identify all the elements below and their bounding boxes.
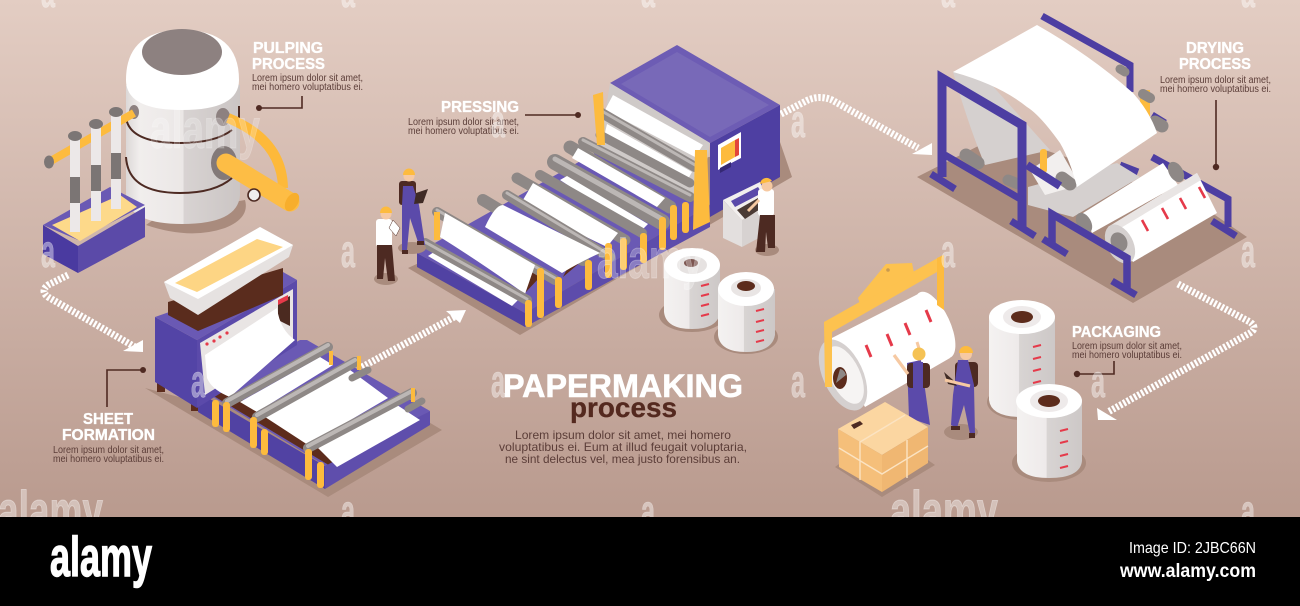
tank shadow (146, 200, 246, 233)
label: pulping process: PROCESS (252, 56, 325, 73)
label: drying process: PROCESS (1179, 56, 1251, 73)
stock watermarks: a (1091, 355, 1105, 407)
stock footer band: alamy (50, 525, 152, 588)
upper rollers and paper (583, 95, 703, 197)
label: sheet formation: Lorem ipsum dolor sit amet, (53, 445, 164, 456)
panel: sheet formation machine (145, 227, 442, 497)
stock watermarks: alamy (597, 227, 703, 290)
intro text: Lorem ipsum dolor sit amet, mei homero (515, 428, 731, 442)
yellow posts (212, 351, 415, 488)
label: sheet formation: SHEET (83, 411, 134, 428)
stock watermarks: a (791, 355, 805, 407)
label: drying process: mei homero voluptatibus ei. (1160, 84, 1271, 95)
rollers (227, 345, 422, 448)
yellow posts (434, 92, 710, 327)
machine body (155, 272, 297, 411)
title (503, 368, 743, 423)
stock watermarks: a (641, 485, 655, 537)
intro text: ne sint delectus vel, mea justo forensibus an. (505, 452, 740, 466)
stock watermarks: a (791, 95, 805, 147)
enclosure (600, 45, 780, 217)
label: packaging: mei homero voluptatibus ei. (1072, 350, 1182, 361)
machine shadow (145, 345, 442, 497)
stock watermarks: a (341, 485, 355, 537)
label: drying process: Lorem ipsum dolor sit amet, (1160, 75, 1271, 86)
stock watermarks: a (491, 355, 505, 407)
label: packaging: PACKAGING (1072, 324, 1161, 341)
worker at control desk (748, 178, 779, 256)
title: process (570, 392, 677, 423)
arrow: pulping to sheet formation (44, 275, 143, 352)
stock watermarks: a (491, 95, 505, 147)
finished rolls (1072, 159, 1217, 269)
lifted paper roll (809, 286, 964, 418)
label: sheet formation: mei homero voluptatibus ei. (53, 454, 164, 465)
arrow: sheet formation to pressing (362, 310, 466, 367)
stock footer band (0, 517, 1300, 606)
label: packaging: Lorem ipsum dolor sit amet, (1072, 341, 1182, 352)
intro text: voluptatibus ei. Eum at illud feugait voluptaria, (499, 440, 747, 454)
yellow lifter (824, 255, 944, 387)
rear frame (1042, 16, 1236, 236)
arrow: drying to packaging (1097, 284, 1254, 420)
drying sheet (953, 25, 1157, 187)
middle rollers and paper (507, 147, 670, 257)
label: pulping process: PULPING (253, 40, 323, 57)
bed (417, 150, 710, 327)
panel: packaging (809, 255, 1086, 497)
tall paper roll (987, 300, 1057, 420)
worker in white shirt near pressing (374, 207, 400, 285)
stock watermarks: a (1241, 225, 1255, 277)
front frame (931, 78, 1060, 236)
guide rollers (966, 69, 1162, 184)
stock watermarks: alamy (890, 479, 998, 542)
stirring rods (44, 107, 134, 232)
title: PAPERMAKING (503, 368, 743, 404)
panel: pressing machine (408, 45, 792, 335)
machine shadow (917, 135, 1247, 303)
stock watermarks: a (1241, 485, 1255, 537)
label: sheet formation: FORMATION (62, 427, 155, 444)
yellow pipes (226, 118, 302, 214)
worker reaching to roll (894, 342, 930, 425)
front lower frame (1043, 214, 1136, 295)
stock watermarks: alamy (0, 479, 103, 542)
label: sheet formation (53, 367, 164, 465)
label: pressing: Lorem ipsum dolor sit amet, (408, 117, 519, 128)
short paper roll (1012, 384, 1086, 482)
label: pulping process: mei homero voluptatibus ei. (252, 82, 363, 93)
stock footer band: Image ID: 2JBC66N (1129, 540, 1256, 557)
stock watermarks: a (191, 355, 205, 407)
label: pressing: PRESSING (441, 99, 519, 116)
arrow: pressing to drying (781, 98, 932, 155)
panel: pulping machine (43, 29, 302, 273)
stock watermarks: a (41, 225, 55, 277)
paper rolls near pressing (659, 248, 778, 354)
bed (198, 340, 430, 489)
stock watermarks: alamy (150, 97, 260, 160)
stock footer band: www.alamy.com (1119, 561, 1256, 582)
control desk (723, 182, 770, 247)
label: pressing: mei homero voluptatibus ei. (408, 126, 519, 137)
front rollers and paper (425, 200, 600, 306)
machine shadow (408, 142, 792, 335)
worker with clipboard near pressing (398, 169, 428, 254)
panel: drying machine (917, 16, 1247, 303)
label: pulping process: Lorem ipsum dolor sit amet, (252, 73, 363, 84)
cardboard boxes (835, 402, 935, 497)
worker with clipboard (944, 346, 978, 440)
label: pulping process (252, 40, 363, 111)
lower sheet (953, 72, 1150, 217)
label: packaging (1072, 324, 1182, 377)
paper sheets (205, 308, 420, 467)
hopper (164, 227, 293, 331)
label: drying process (1160, 40, 1271, 170)
label: drying process: DRYING (1186, 40, 1244, 57)
label: pressing (408, 99, 581, 137)
purple vat (43, 187, 145, 273)
pulp tank (126, 29, 240, 224)
intro text (499, 428, 747, 466)
stock watermarks: a (941, 225, 955, 277)
stock watermarks: a (341, 225, 355, 277)
